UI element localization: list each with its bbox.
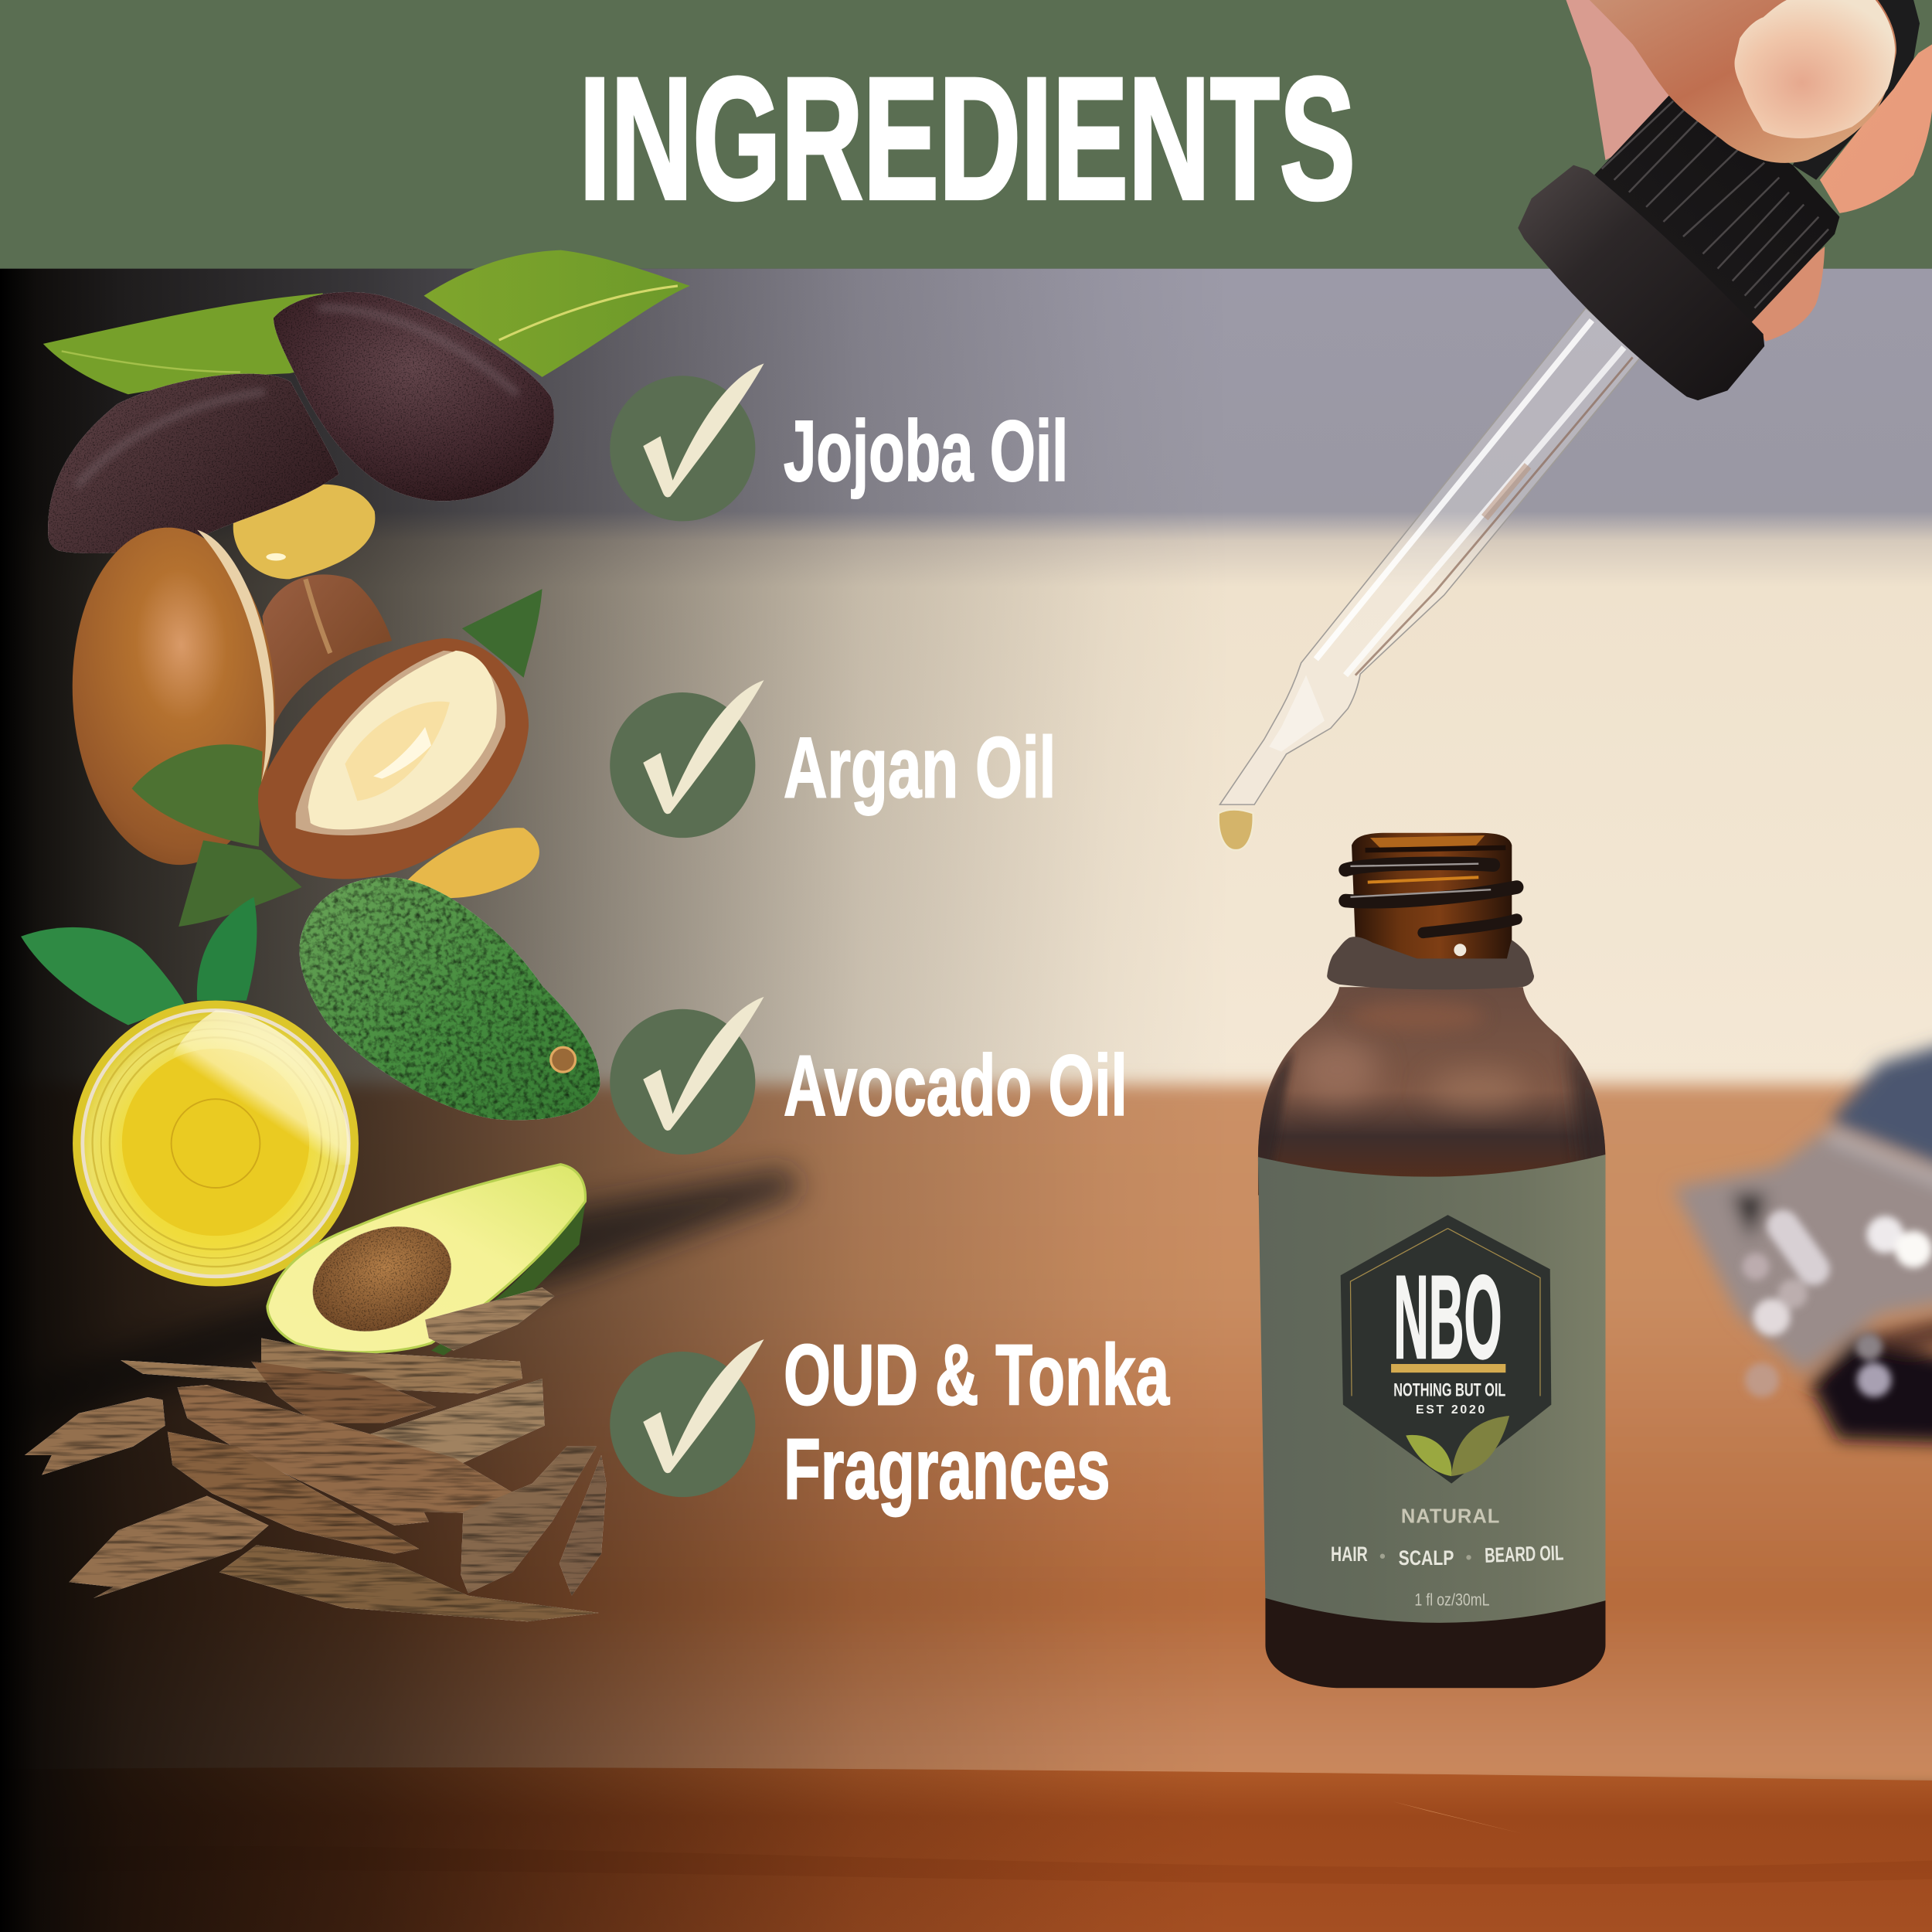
check icon [610, 363, 764, 521]
checklist item: OUD and Tonka Fragrances [610, 1327, 1170, 1517]
thumb [1590, 0, 1896, 163]
header band [0, 0, 1932, 269]
dropper and hand [1219, 0, 1932, 850]
HAIR SCALP BEARD OIL [1331, 1540, 1564, 1570]
checklist item: Jojoba Oil [610, 363, 1068, 521]
jojoba: leaves, seeds and oil [43, 250, 690, 579]
NBO hexagon logo: NBO [1393, 1251, 1502, 1383]
NATURAL: NATURAL [1401, 1506, 1499, 1528]
frosted shoulder and body [1252, 986, 1614, 1196]
label [784, 1327, 1170, 1517]
label: Fragrances [784, 1420, 1111, 1517]
bottle label [1258, 1155, 1605, 1623]
checklist item: Argan Oil [610, 680, 1056, 838]
glass pipette [1219, 308, 1642, 804]
thumbnail [1734, 0, 1895, 138]
product bottle [1252, 833, 1614, 1688]
HAIR SCALP BEARD OIL: SCALP [1399, 1546, 1454, 1570]
clipper blur [1673, 1029, 1932, 1444]
argan: nuts, kernel, leaves and oil [64, 522, 543, 927]
base [1265, 1590, 1605, 1688]
avocado oil: glass bowl with leaves [21, 897, 359, 1287]
ingredient illustration stack [21, 250, 690, 1621]
checklist item: Avocado Oil [610, 997, 1128, 1155]
HAIR SCALP BEARD OIL: BEARD OIL [1485, 1540, 1564, 1567]
gold bar [1391, 1364, 1505, 1372]
check icon [610, 680, 764, 838]
black sleeve behind thumb [1793, 0, 1920, 180]
check icon [610, 997, 764, 1155]
label: Avocado Oil [784, 1037, 1128, 1134]
NBO hexagon logo [1341, 1215, 1551, 1484]
volume: 1 fl oz/30mL [1414, 1590, 1490, 1609]
avocado half with pit [267, 1165, 587, 1355]
comb blur [0, 1168, 801, 1435]
oud wood chips [25, 1287, 606, 1621]
NOTHING BUT OIL: NOTHING BUT OIL [1393, 1379, 1505, 1400]
collar [1327, 937, 1534, 989]
left shadow overlay [0, 269, 1232, 1932]
label: OUD & Tonka [784, 1327, 1170, 1423]
check icon [610, 1339, 764, 1497]
amber threaded neck [1345, 833, 1517, 974]
EST 2020: EST 2020 [1416, 1403, 1485, 1417]
whole avocado [299, 877, 600, 1120]
leaves [1406, 1416, 1509, 1476]
ribbed grip [1594, 95, 1839, 323]
hand: fingers behind cap [1566, 0, 1932, 342]
title: INGREDIENTS [579, 41, 1355, 236]
label: Argan Oil [784, 719, 1056, 816]
HAIR SCALP BEARD OIL: HAIR [1331, 1542, 1368, 1566]
label: Jojoba Oil [784, 403, 1068, 499]
cap collar [1518, 165, 1764, 400]
oil drop [1219, 810, 1253, 850]
